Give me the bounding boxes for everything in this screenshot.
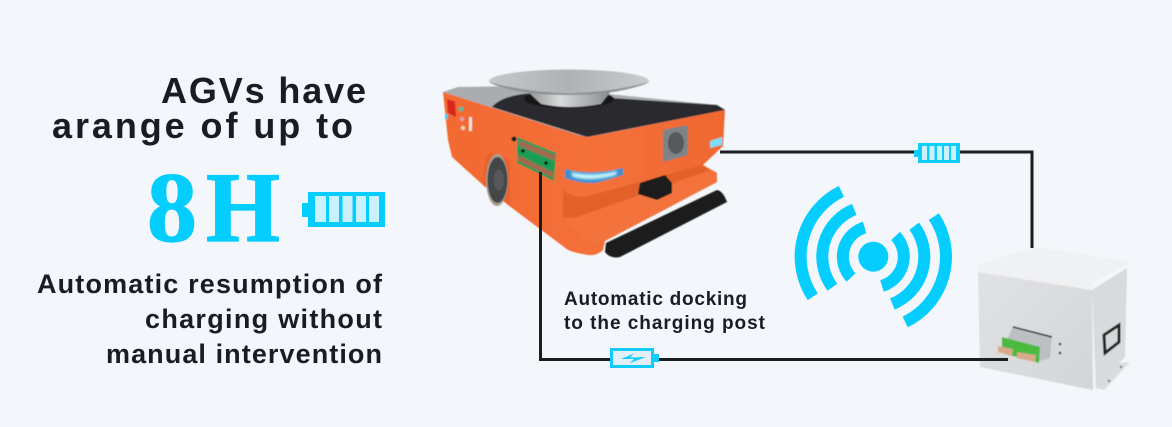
control buttons xyxy=(458,106,472,131)
left signal arcs xyxy=(801,191,865,297)
robot top plate xyxy=(443,86,725,138)
robot recess under shell xyxy=(563,165,709,218)
right signal arcs xyxy=(882,217,946,322)
post front face xyxy=(978,272,1093,390)
charging contact plate xyxy=(517,137,556,181)
front light strip xyxy=(565,168,623,183)
robot: orange AGV xyxy=(443,70,727,257)
robot bumper xyxy=(605,190,727,257)
connector top edge xyxy=(1013,327,1052,337)
stat: 8H: H xyxy=(206,152,280,263)
charging post xyxy=(977,247,1133,390)
heading: AGVs have a range of up to xyxy=(52,70,366,146)
left light strip xyxy=(445,114,448,119)
text: automatic resumption of charging: charging without xyxy=(145,304,382,334)
speaker grille xyxy=(663,125,688,162)
side handle xyxy=(1104,325,1119,353)
copper contacts xyxy=(998,346,1036,362)
wire: top charging cable xyxy=(720,152,1032,248)
robot motor block xyxy=(638,175,672,200)
icon: large battery xyxy=(302,192,385,227)
heading: AGVs have a range of up to: arange of up to xyxy=(52,105,353,146)
label: automatic docking: Automatic docking xyxy=(564,289,747,310)
robot lower deck highlight xyxy=(563,170,717,243)
robot orange body xyxy=(443,92,725,255)
mounting bracket xyxy=(1097,358,1130,390)
sensor hole xyxy=(512,136,516,142)
red switch xyxy=(447,99,456,117)
text: automatic resumption of charging: manual intervention xyxy=(106,339,382,369)
label: automatic docking: to the charging post xyxy=(564,313,766,334)
indicator dots xyxy=(1059,343,1061,354)
turntable xyxy=(489,70,649,108)
post side face xyxy=(1092,268,1127,390)
right light strip xyxy=(710,137,722,148)
wheel arch and wheel xyxy=(483,152,510,206)
stat: 8H: 8 xyxy=(147,152,197,263)
connector green plate xyxy=(1002,337,1040,363)
text: automatic resumption of charging: Automatic resumption of xyxy=(37,269,383,299)
connector housing xyxy=(1005,326,1052,362)
heading: AGVs have a range of up to: AGVs have xyxy=(161,70,366,111)
icon: top wire battery xyxy=(914,143,960,163)
stat: 8H xyxy=(147,152,280,263)
post lid xyxy=(977,247,1133,290)
icon: bottom wire charging battery xyxy=(612,350,659,366)
robot dark top surface xyxy=(492,93,725,137)
wire: bottom charging cable xyxy=(540,172,1008,360)
text: automatic resumption of charging xyxy=(37,269,383,369)
label: automatic docking xyxy=(564,289,766,334)
icon: wireless signal xyxy=(801,191,946,322)
